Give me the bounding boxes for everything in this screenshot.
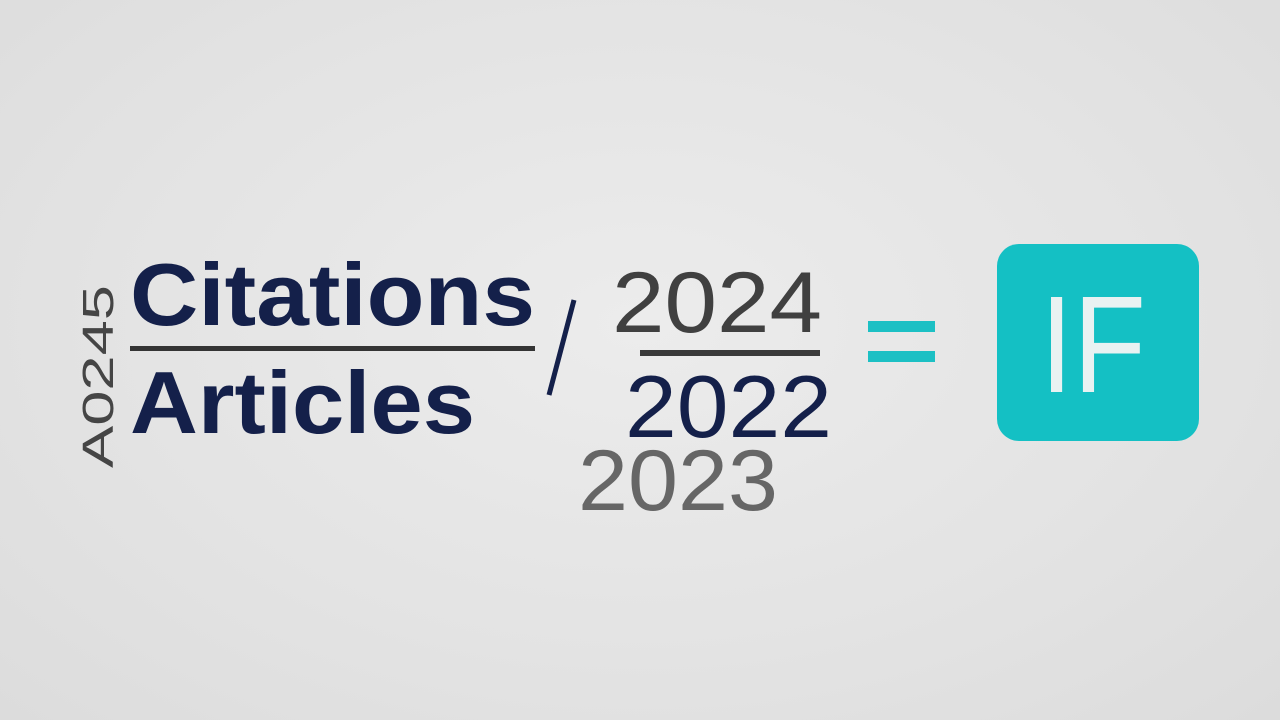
fraction line left [130, 346, 535, 351]
denominator: Articles: Articles [130, 353, 475, 452]
year 2023: 2023 [578, 433, 778, 529]
rotated label A0245: A0245 [74, 285, 123, 468]
year 2022: 2022 [625, 357, 832, 456]
fraction line right [640, 350, 820, 356]
IF result box [997, 244, 1199, 441]
numerator: Citations: Citations [130, 245, 535, 344]
year 2024: 2024 [612, 255, 822, 351]
IF result box: IF [1040, 268, 1146, 422]
slash [549, 300, 574, 395]
equals sign [868, 321, 935, 362]
